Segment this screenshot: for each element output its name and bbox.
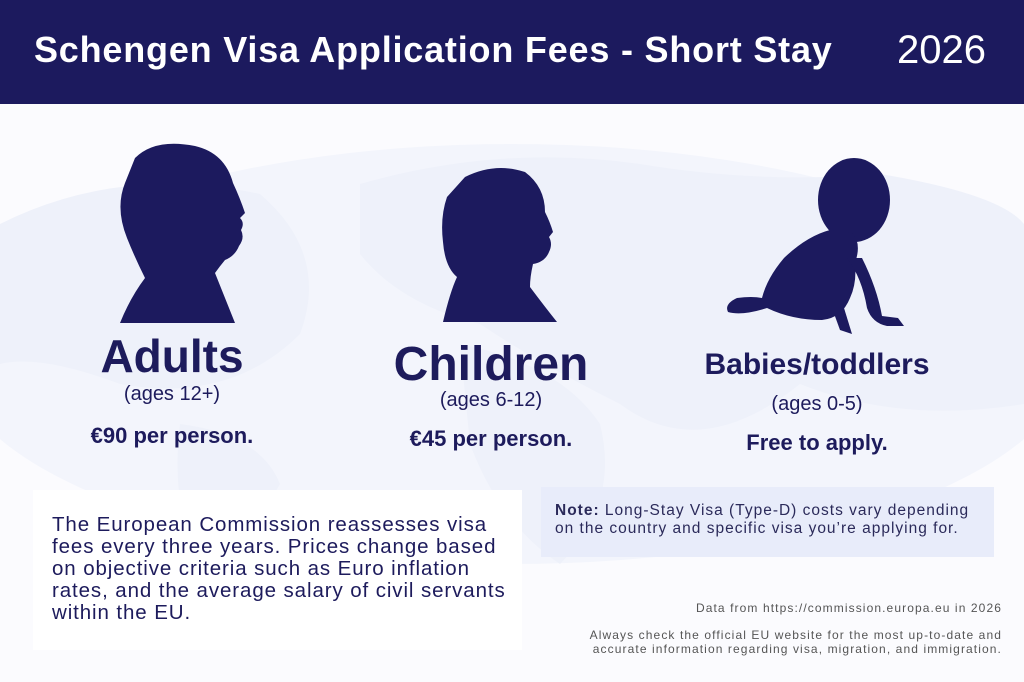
note box: Note: Long-Stay Visa (Type-D) costs vary depending xyxy=(555,502,969,519)
label: children xyxy=(394,338,588,451)
label: adults: €90 per person. xyxy=(91,423,253,448)
note box xyxy=(541,487,994,557)
source text: Data from https://commission.europa.eu in 2026 xyxy=(696,601,1002,615)
label: babies: (ages 0-5) xyxy=(771,393,863,415)
icon: child silhouette xyxy=(442,168,557,322)
icon: baby silhouette xyxy=(727,158,904,334)
header bar xyxy=(0,0,1024,104)
text block: explanation xyxy=(33,490,522,650)
text block: explanation: on objective criteria such as Euro inflation xyxy=(52,557,470,580)
label: adults xyxy=(90,330,253,448)
label: babies: Babies/toddlers xyxy=(704,348,930,381)
label: adults: (ages 12+) xyxy=(124,383,220,405)
label: babies xyxy=(704,348,930,455)
label: adults: Adults xyxy=(100,330,244,382)
text block: explanation: The European Commission reassesses visa xyxy=(52,513,487,536)
text block: explanation: rates, and the average salary of civil servants xyxy=(52,579,506,602)
icon: adult silhouette xyxy=(120,144,245,323)
disclaimer: accurate information regarding visa, migration, and immigration. xyxy=(593,642,1002,656)
label: children: Children xyxy=(394,338,588,391)
text block: explanation: fees every three years. Prices change based xyxy=(52,535,496,558)
disclaimer xyxy=(590,628,1002,656)
label: children: €45 per person. xyxy=(410,426,572,451)
label: children: (ages 6-12) xyxy=(440,389,542,411)
text block: explanation: within the EU. xyxy=(52,601,191,624)
year: 2026 xyxy=(897,28,986,72)
label: babies: Free to apply. xyxy=(746,430,888,455)
title: Schengen Visa Application Fees - Short Stay xyxy=(34,29,833,70)
note box: on the country and specific visa you’re applying for. xyxy=(555,520,959,537)
disclaimer: Always check the official EU website for the most up-to-date and xyxy=(590,628,1002,642)
